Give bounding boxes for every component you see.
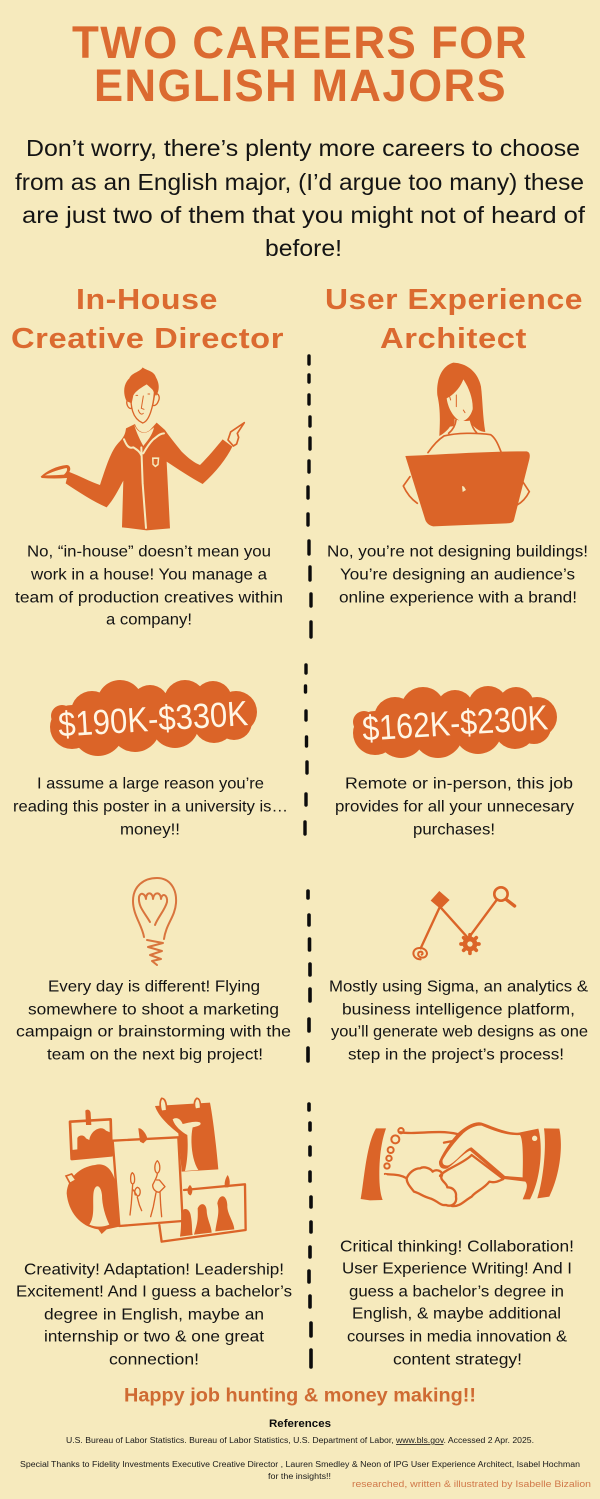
text: salary right: purchases! (413, 822, 495, 838)
intro text: Don’t worry, there’s plenty more careers to choose (26, 135, 580, 161)
references: U.S. Bureau of Labor Statistics. Bureau of Labor Statistics, U.S. Department of Labor, www.bls.gov . Accessed 2 Apr. 2025. (66, 1436, 534, 1445)
text: skills right: courses in media innovation & (347, 1328, 567, 1346)
text: salary right: provides for all your unnecesary (335, 798, 574, 816)
references: References (269, 1418, 331, 1430)
text: skills right: User Experience Writing! And I (342, 1260, 572, 1278)
heading: User Experience Architect: Architect (380, 323, 527, 355)
heading: User Experience Architect: User Experience (325, 284, 583, 316)
icon: man gesturing (41, 367, 244, 530)
icon: light bulb (133, 878, 176, 965)
text: skills right: content strategy! (393, 1352, 522, 1368)
salary badge: left: $190K-$330K (57, 694, 249, 745)
title: TWO CAREERS FOR (72, 17, 528, 68)
dashed divider: section 1 (308, 356, 311, 637)
text: day to day right: you’ll generate web designs as one (331, 1024, 588, 1040)
dashed divider: section 4 (309, 1104, 311, 1367)
text: skills left: degree in English, maybe an (44, 1306, 264, 1324)
heading: In-House Creative Director: In-House (76, 284, 218, 316)
heading: In-House Creative Director (11, 284, 284, 355)
title (72, 17, 528, 111)
references: Special Thanks to Fidelity Investments Executive Creative Director , Lauren Smedley & Neon of IPG User Experience Architect, Isabel Hochman (20, 1460, 580, 1469)
text: day to day right: step in the project’s process! (348, 1046, 564, 1064)
text: day to day right: business intelligence platform, (342, 1002, 575, 1018)
references (20, 1418, 580, 1481)
text: skills right: guess a bachelor’s degree in (349, 1284, 564, 1300)
intro text: from as an English major, (I’d argue too many) these (15, 169, 584, 195)
text: skills left: Excitement! And I guess a bachelor’s (16, 1284, 292, 1300)
heading: User Experience Architect (325, 284, 583, 355)
text: skills right: English, & maybe additional (352, 1306, 561, 1322)
title: ENGLISH MAJORS (94, 60, 507, 111)
text: salary left: money!! (120, 822, 180, 838)
text: UX architect explanation: online experience with a brand! (339, 590, 577, 606)
intro text: before! (265, 235, 342, 261)
text: day to day right (329, 978, 588, 1064)
text: day to day left (16, 978, 291, 1064)
text: skills left (16, 1262, 292, 1368)
text: in-house explanation: team of production creatives within (15, 590, 283, 606)
text: skills left: connection! (109, 1352, 199, 1368)
credit line: researched, written & illustrated by Isabelle Bizalion (352, 1479, 591, 1490)
salary badge: right: $162K-$230K (361, 698, 549, 749)
text: skills left: internship or two & one great (44, 1328, 265, 1346)
text: in-house explanation (15, 544, 283, 628)
text: skills right: Critical thinking! Collaboration! (340, 1238, 574, 1256)
intro text: are just two of them that you might not of heard of (22, 202, 586, 228)
text: skills left: Creativity! Adaptation! Leadership! (24, 1262, 284, 1278)
icon: chart with gear and magnifier (413, 887, 515, 959)
text: salary right (335, 776, 574, 838)
text: day to day right: Mostly using Sigma, an analytics & (329, 978, 588, 996)
text: salary right: Remote or in-person, this job (345, 776, 573, 792)
text: salary left: I assume a large reason you’re (37, 776, 264, 792)
closing line: Happy job hunting & money making!! (124, 1386, 476, 1406)
text: UX architect explanation (327, 544, 588, 606)
text: UX architect explanation: No, you’re not designing buildings! (327, 544, 588, 560)
heading: In-House Creative Director: Creative Director (11, 323, 284, 355)
text: day to day left: team on the next big project! (47, 1046, 263, 1064)
text: UX architect explanation: You’re designing an audience’s (340, 566, 575, 584)
dashed divider: section 3 (308, 891, 310, 1061)
text: in-house explanation: a company! (106, 612, 192, 628)
icon: pinned photo board (66, 1098, 246, 1242)
intro text (15, 135, 586, 261)
text: day to day left: Every day is different! Flying (48, 978, 260, 996)
dashed divider: section 2 (305, 665, 307, 834)
text: day to day left: campaign or brainstorming with the (16, 1024, 291, 1040)
text: salary left (13, 776, 288, 838)
text: salary left: reading this poster in a university is… (13, 798, 288, 816)
salary badge: right (353, 686, 557, 758)
references: for the insights!! (268, 1472, 331, 1481)
text: in-house explanation: No, “in-house” doesn’t mean you (27, 544, 271, 560)
icon: handshake (361, 1122, 561, 1206)
icon: woman at laptop (403, 363, 530, 526)
text: skills right (340, 1238, 574, 1368)
text: day to day left: somewhere to shoot a marketing (28, 1002, 279, 1018)
text: in-house explanation: work in a house! You manage a (30, 566, 267, 584)
salary badge: left (50, 680, 257, 756)
